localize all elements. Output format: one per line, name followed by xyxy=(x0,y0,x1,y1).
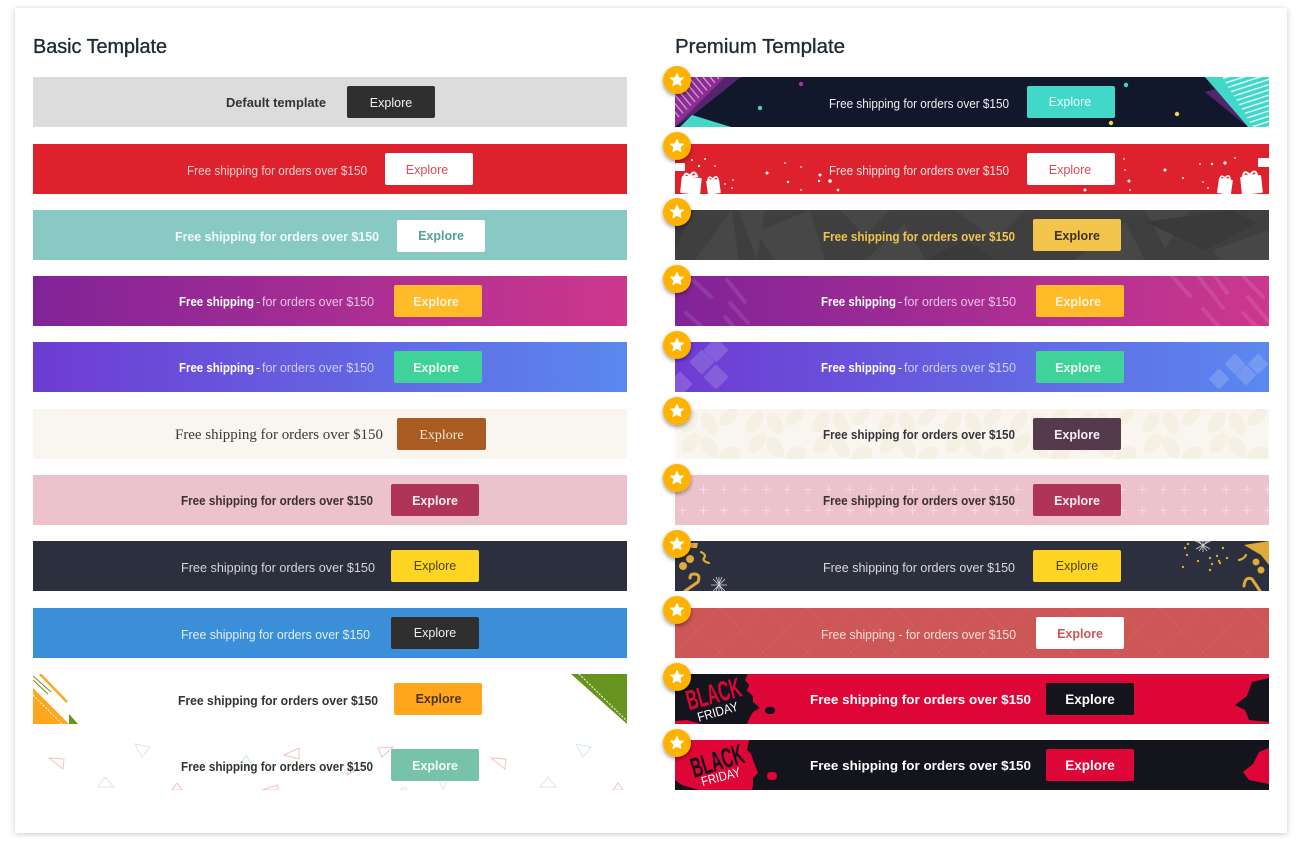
premium banner: charcoal polygons xyxy=(675,210,1269,260)
premium banner: purple gradient with streaks: for orders over $150 xyxy=(904,295,1016,309)
icon: premium star badge 11 xyxy=(663,729,691,757)
basic banner: teal xyxy=(33,210,627,260)
basic banner: red: Explore xyxy=(406,163,448,177)
premium banner: black Black Friday: Free shipping for orders over $150 xyxy=(810,758,1031,773)
premium banner: navy with Christmas decorations: Free shipping for orders over $150 xyxy=(823,560,1015,575)
basic banner: default template: Explore xyxy=(370,96,412,110)
heading: Premium Template: Premium Template xyxy=(675,36,845,58)
basic banner: teal: Free shipping for orders over $150 xyxy=(175,229,379,244)
basic banner: blue violet gradient: Free shipping xyxy=(179,361,254,375)
basic banner: blue: Free shipping for orders over $150 xyxy=(181,627,370,642)
premium banner: pink with plus signs: Explore xyxy=(1054,494,1100,508)
premium banner: red with gifts xyxy=(675,144,1269,194)
basic banner: purple gradient: Explore xyxy=(413,295,459,309)
basic banner: white with orange and green corners: Explore xyxy=(416,692,461,706)
premium banner: coral with lattice: Free shipping - for orders over $150 xyxy=(821,627,1016,642)
premium banner: violet gradient with diamonds: Explore xyxy=(1055,361,1101,375)
basic banner: white with triangle confetti: Explore xyxy=(412,759,458,773)
basic banner: purple gradient: Free shipping xyxy=(179,295,254,309)
premium banner: black Black Friday xyxy=(675,738,1269,790)
basic banner: dark navy: Explore xyxy=(414,559,456,573)
basic banner: pink: Free shipping for orders over $150 xyxy=(181,494,373,508)
basic banner: cream serif: Free shipping for orders over $150 xyxy=(175,427,383,443)
icon: premium star badge 2 xyxy=(663,132,691,160)
icon: premium star badge 3 xyxy=(663,198,691,226)
premium banner: red with gifts: Explore xyxy=(1049,163,1091,177)
premium banner: red Black Friday: Explore xyxy=(1065,692,1115,707)
basic banner: purple gradient: for orders over $150 xyxy=(262,295,374,309)
basic banner: default template xyxy=(33,77,627,127)
basic banner: white with orange and green corners xyxy=(33,674,627,724)
basic banner: blue violet gradient xyxy=(33,342,627,392)
basic banner: cream serif xyxy=(33,409,627,459)
basic banner: blue: Explore xyxy=(414,626,456,640)
basic banner: blue violet gradient: Explore xyxy=(413,361,459,375)
premium banner: cream with leaves: Explore xyxy=(1054,428,1100,442)
premium banner: pink with plus signs: Free shipping for orders over $150 xyxy=(823,494,1015,508)
icon: premium star badge 6 xyxy=(663,397,691,425)
heading: Basic Template: Basic Template xyxy=(33,36,167,58)
basic banner: default template: Default template xyxy=(226,95,326,110)
premium banner: violet gradient with diamonds: Free shipping xyxy=(821,361,896,375)
basic banner: blue violet gradient: - xyxy=(256,361,260,375)
premium banner: red with gifts: Free shipping for orders over $150 xyxy=(829,164,1009,178)
premium banner: violet gradient with diamonds: - xyxy=(898,361,902,375)
icon: premium star badge 1 xyxy=(663,66,691,94)
icon: premium star badge 4 xyxy=(663,265,691,293)
premium banner: coral with lattice: Explore xyxy=(1057,627,1103,641)
premium banner: navy with Christmas decorations: Explore xyxy=(1056,559,1098,573)
icon: premium star badge 7 xyxy=(663,464,691,492)
basic banner: dark navy xyxy=(33,541,627,591)
premium banner: purple gradient with streaks xyxy=(675,276,1269,326)
basic banner: red xyxy=(33,144,627,194)
basic banner: cream serif: Explore xyxy=(419,428,464,443)
premium banner: black Black Friday: FRIDAY xyxy=(700,764,742,789)
icon: premium star badge 8 xyxy=(663,530,691,558)
basic banner: purple gradient: - xyxy=(256,295,260,309)
basic banner: white with triangle confetti: Free shipping for orders over $150 xyxy=(181,760,373,774)
premium banner: black Black Friday: Explore xyxy=(1065,758,1115,773)
premium banner: red Black Friday: FRIDAY xyxy=(696,699,740,725)
premium banner: cream with leaves xyxy=(675,409,1269,459)
basic banner: white with triangle confetti xyxy=(48,743,624,790)
basic banner: white with orange and green corners: Free shipping for orders over $150 xyxy=(178,693,378,708)
premium banner: red Black Friday xyxy=(675,672,1269,725)
icon: premium star badge 10 xyxy=(663,663,691,691)
icon: premium star badge 5 xyxy=(663,331,691,359)
premium banner: purple gradient with streaks: Explore xyxy=(1055,295,1101,309)
premium banner: coral with lattice xyxy=(675,608,1269,658)
basic banner: blue xyxy=(33,608,627,658)
premium banner: violet gradient with diamonds: for orders over $150 xyxy=(904,361,1016,375)
premium banner: navy geometric xyxy=(675,77,1269,127)
basic banner: purple gradient xyxy=(33,276,627,326)
basic banner: dark navy: Free shipping for orders over $150 xyxy=(181,560,375,575)
basic banner: red: Free shipping for orders over $150 xyxy=(187,164,367,178)
premium banner: navy with Christmas decorations xyxy=(675,541,1269,591)
premium banner: navy geometric: Free shipping for orders over $150 xyxy=(829,97,1009,111)
premium banner: violet gradient with diamonds xyxy=(675,342,1269,392)
premium banner: purple gradient with streaks: - xyxy=(898,295,902,309)
premium banner: navy geometric: Explore xyxy=(1049,95,1091,109)
premium banner: charcoal polygons: Explore xyxy=(1054,229,1100,243)
icon: premium star badge 9 xyxy=(663,596,691,624)
basic banner: teal: Explore xyxy=(418,229,464,243)
premium banner: charcoal polygons: Free shipping for orders over $150 xyxy=(823,230,1015,244)
premium banner: pink with plus signs xyxy=(675,475,1269,525)
premium banner: purple gradient with streaks: Free shipping xyxy=(821,295,896,309)
premium banner: red Black Friday: Free shipping for orders over $150 xyxy=(810,692,1031,707)
basic banner: pink: Explore xyxy=(412,494,458,508)
premium banner: cream with leaves: Free shipping for orders over $150 xyxy=(823,428,1015,442)
basic banner: blue violet gradient: for orders over $150 xyxy=(262,361,374,375)
basic banner: pink xyxy=(33,475,627,525)
